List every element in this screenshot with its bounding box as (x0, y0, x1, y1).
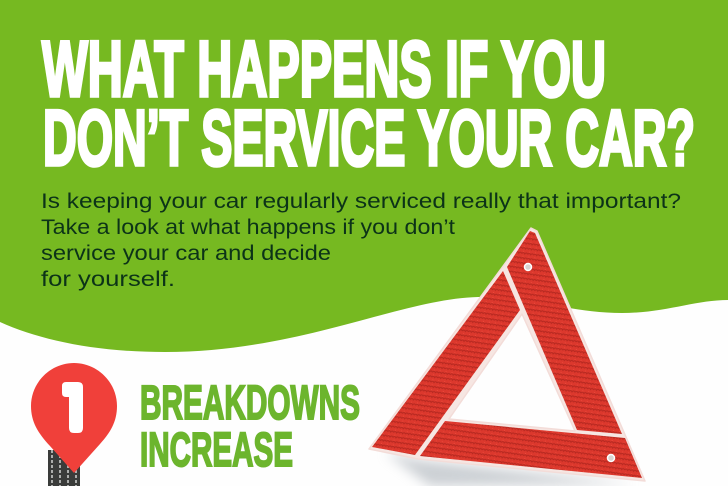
title (42, 24, 695, 182)
bottom bar (420, 421, 642, 478)
intro text (41, 190, 681, 291)
intro text: Is keeping your car regularly serviced really that important? (41, 190, 681, 213)
icon: number 1 map pin (31, 363, 117, 473)
numeral 1 (62, 382, 83, 433)
icon: warning triangle (369, 228, 645, 486)
green header panel with wavy bottom edge (0, 0, 728, 352)
left bar (372, 271, 520, 455)
section heading: INCREASE (140, 424, 293, 477)
rivets (524, 264, 614, 462)
intro text: for yourself. (41, 268, 175, 291)
triangle outline backing (369, 228, 645, 481)
intro text: Take a look at what happens if you don’t (41, 216, 455, 239)
section heading: BREAKDOWNS (140, 377, 360, 430)
intro text: service your car and decide (41, 242, 331, 265)
icon: tyre track (48, 450, 80, 486)
right bar (507, 231, 622, 434)
section heading (140, 377, 360, 477)
triangle ground shadow (385, 452, 635, 486)
